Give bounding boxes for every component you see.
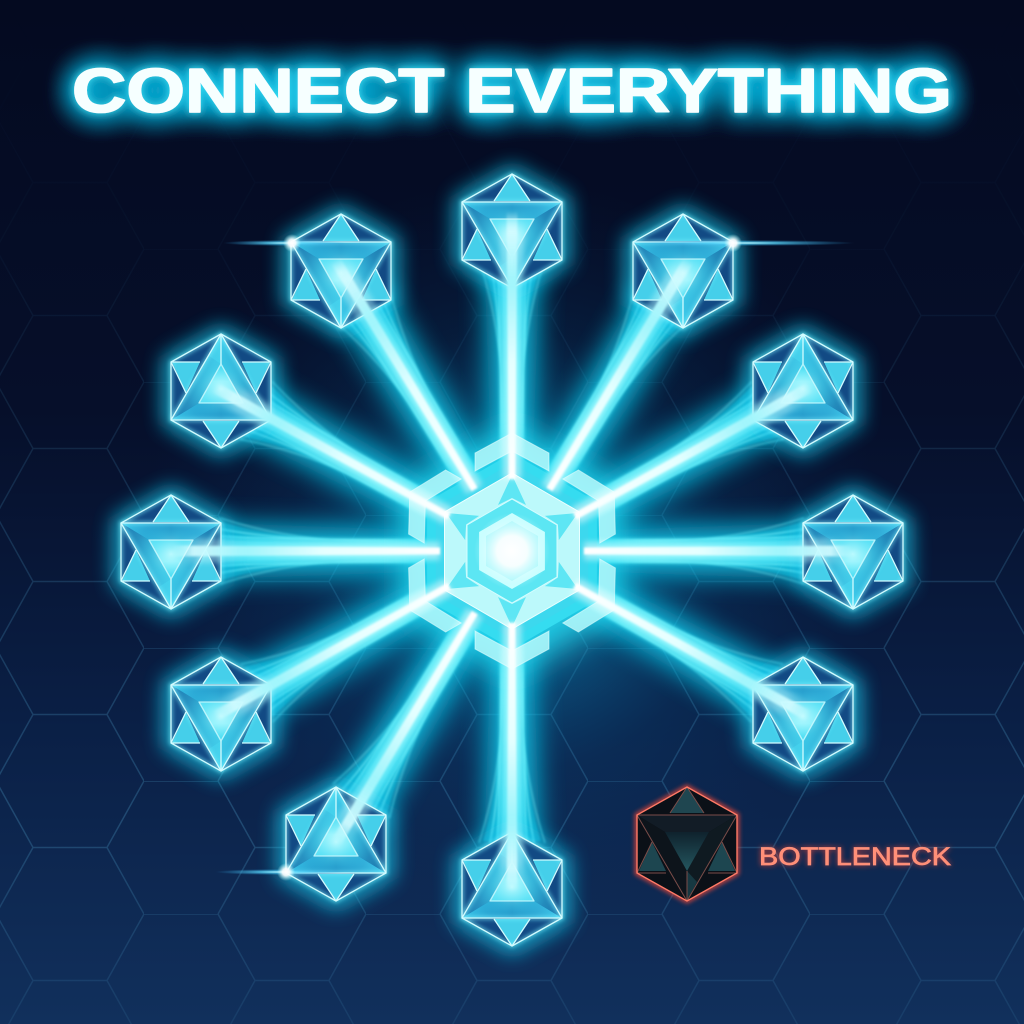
node: right	[803, 495, 903, 609]
beam: lower left	[329, 594, 504, 825]
node: upper right	[633, 214, 733, 328]
beam: top	[479, 251, 545, 481]
hub inner ring	[479, 513, 545, 589]
hub core	[486, 521, 538, 581]
bottleneck node	[637, 787, 737, 901]
beam: upper left	[328, 278, 504, 508]
node: right upper	[753, 334, 853, 448]
beam: right	[582, 518, 812, 584]
central hexagon hub	[391, 426, 633, 676]
node: top	[462, 174, 562, 288]
beam: left	[212, 518, 442, 584]
hub star facets	[439, 475, 585, 627]
beam: bottom	[479, 621, 545, 851]
hub glow	[404, 426, 620, 676]
hub outer ring	[427, 453, 597, 649]
hub white center	[474, 513, 550, 589]
beam: upper right	[520, 278, 696, 508]
title: CONNECT EVERYTHING	[72, 57, 952, 126]
hub dark ring	[436, 463, 588, 639]
node: left lower	[171, 657, 271, 771]
hub light hexagon	[444, 473, 580, 629]
hub petals	[391, 433, 633, 669]
node: bottom	[462, 832, 562, 946]
beam: right lower	[557, 556, 790, 726]
node: right lower	[753, 657, 853, 771]
beam: left upper	[233, 378, 467, 546]
hub middle ring	[467, 499, 557, 603]
beam cores	[172, 211, 852, 891]
bottleneck label: BOTTLENECK	[759, 843, 951, 871]
hexagon grid background	[0, 280, 1024, 1024]
peripheral nodes	[121, 174, 903, 946]
node: lower left	[286, 787, 386, 901]
node: left	[121, 495, 221, 609]
beams	[212, 251, 812, 851]
node: upper left	[291, 214, 391, 328]
beam: right upper	[557, 378, 791, 546]
beam: left lower	[234, 556, 467, 726]
lens flares on node corners	[215, 234, 855, 881]
node: left upper	[171, 334, 271, 448]
